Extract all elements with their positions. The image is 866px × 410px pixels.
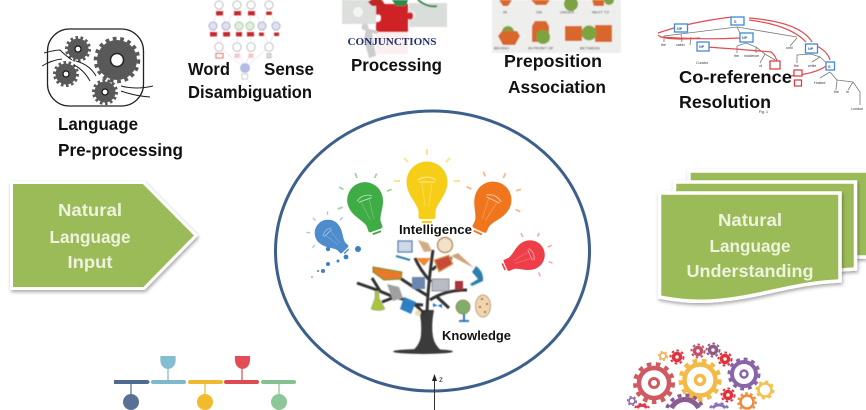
label: knowledge: Knowledge xyxy=(442,329,511,343)
heading: preposition association xyxy=(504,51,606,97)
icon: co-reference parse tree: London xyxy=(851,107,863,111)
icon: co-reference parse tree: of xyxy=(759,64,762,68)
heading: processing: Processing xyxy=(351,55,442,75)
icon: preposition cubes xyxy=(492,0,621,53)
heading: co-reference resolution: Co-reference xyxy=(679,67,792,87)
icon: z axis: z xyxy=(439,375,443,384)
icon: preposition cubes: IN xyxy=(503,10,507,14)
icon: co-reference parse tree: Hosted xyxy=(814,81,825,85)
icon: co-reference parse tree: while xyxy=(808,64,816,68)
item: blue cable xyxy=(396,256,410,260)
icon: co-reference parse tree: Fig. 1 xyxy=(759,110,768,114)
icon: green bulb xyxy=(328,163,404,243)
heading: word sense disambiguation: Disambiguation xyxy=(188,82,312,102)
icon: co-reference parse tree: S xyxy=(828,65,831,69)
item: bow xyxy=(433,303,442,308)
item: palette paint xyxy=(479,299,488,312)
icon: knowledge tree xyxy=(357,238,490,354)
heading: language pre-processing xyxy=(58,114,183,160)
item: book xyxy=(373,267,402,280)
icon: orange bulb xyxy=(451,161,532,245)
icon: small red gears xyxy=(670,344,734,402)
panel: central circle xyxy=(276,111,590,391)
panel: natural language understanding stacked documents: Natural xyxy=(718,210,782,230)
heading: co-reference resolution xyxy=(679,67,792,112)
icon: co-reference parse tree: cabin xyxy=(676,43,685,47)
item: flask xyxy=(371,291,385,310)
icon: co-reference parse tree: incidence xyxy=(744,54,759,58)
icon: paint splashes xyxy=(311,246,361,278)
heading: word sense disambiguation: Word xyxy=(188,59,230,79)
item: globe xyxy=(456,300,470,314)
icon: co-reference parse tree: NP xyxy=(677,27,683,31)
heading: word sense disambiguation xyxy=(188,59,314,102)
item: cream shape xyxy=(415,310,421,316)
icon: preposition cubes: BEHIND xyxy=(494,46,509,50)
item: red book xyxy=(434,255,453,272)
icon: word sense network xyxy=(209,1,280,79)
icon: timeline xyxy=(114,356,296,410)
icon: co-reference parse tree: NP xyxy=(742,36,748,40)
icon: co-reference parse tree: until xyxy=(786,46,793,50)
icon: co-reference parse tree: the xyxy=(794,64,799,68)
panel: natural language understanding stacked documents: Language xyxy=(710,236,791,256)
icon: preposition cubes: NEXT TO xyxy=(592,10,609,14)
heading: preposition association: Preposition xyxy=(504,51,602,71)
icon: co-reference parse tree: Curator xyxy=(696,61,709,65)
item: clock xyxy=(438,238,452,252)
item: paper cone xyxy=(451,253,474,268)
item: tablet xyxy=(398,241,412,252)
heading: preposition association: Association xyxy=(508,77,606,97)
item: hand xyxy=(418,240,432,252)
icon: co-reference parse tree: NP xyxy=(699,45,705,49)
panel: natural language input arrow xyxy=(12,182,196,288)
icon: preposition cubes: ON xyxy=(536,10,542,14)
icon: z axis xyxy=(432,374,443,410)
heading: co-reference resolution: Resolution xyxy=(679,92,771,112)
item: orange bowl xyxy=(416,258,431,266)
panel: natural language understanding stacked documents: Understanding xyxy=(686,261,814,281)
item: microscope xyxy=(470,266,483,286)
icon: red bulb xyxy=(494,224,561,288)
label: intelligence: Intelligence xyxy=(399,223,472,237)
icon: conjunctions puzzle xyxy=(342,0,447,58)
icon: co-reference parse tree: the xyxy=(734,54,739,58)
heading: word sense disambiguation: Sense xyxy=(264,59,314,79)
heading: language pre-processing: Pre-processing xyxy=(58,140,183,160)
panel: natural language input arrow: Input xyxy=(68,252,113,272)
icon: colourful gears xyxy=(628,352,774,409)
heading: language pre-processing: Language xyxy=(58,114,138,134)
item: blue book xyxy=(400,297,416,314)
icon: co-reference parse tree xyxy=(658,17,863,114)
panel: natural language understanding stacked documents xyxy=(660,171,866,301)
item: laptop xyxy=(432,279,449,291)
icon: yellow bulb xyxy=(394,149,460,222)
icon: blue bulb xyxy=(298,203,362,267)
icon: preposition cubes: UNDER xyxy=(560,10,574,14)
item: palette xyxy=(476,295,490,317)
item: red device xyxy=(455,281,463,290)
item: cube xyxy=(412,277,425,289)
icon: co-reference parse tree: NP xyxy=(808,47,814,51)
icon: co-reference parse tree: S xyxy=(734,20,737,24)
panel: natural language input arrow: Natural xyxy=(58,200,122,220)
panel: natural language input arrow: Language xyxy=(50,227,131,247)
icon: preposition cubes: BETWEEN xyxy=(580,46,600,50)
item: grey instrument xyxy=(387,284,403,301)
icon: preposition cubes: IN FRONT OF xyxy=(528,46,554,50)
icon: co-reference parse tree: in xyxy=(846,90,849,94)
icon: co-reference parse tree: the xyxy=(834,90,839,94)
label: conjunctions: CONJUNCTIONS xyxy=(348,37,437,48)
icon: co-reference parse tree: the xyxy=(661,43,666,47)
icon: language pre-processing gears xyxy=(42,29,153,106)
